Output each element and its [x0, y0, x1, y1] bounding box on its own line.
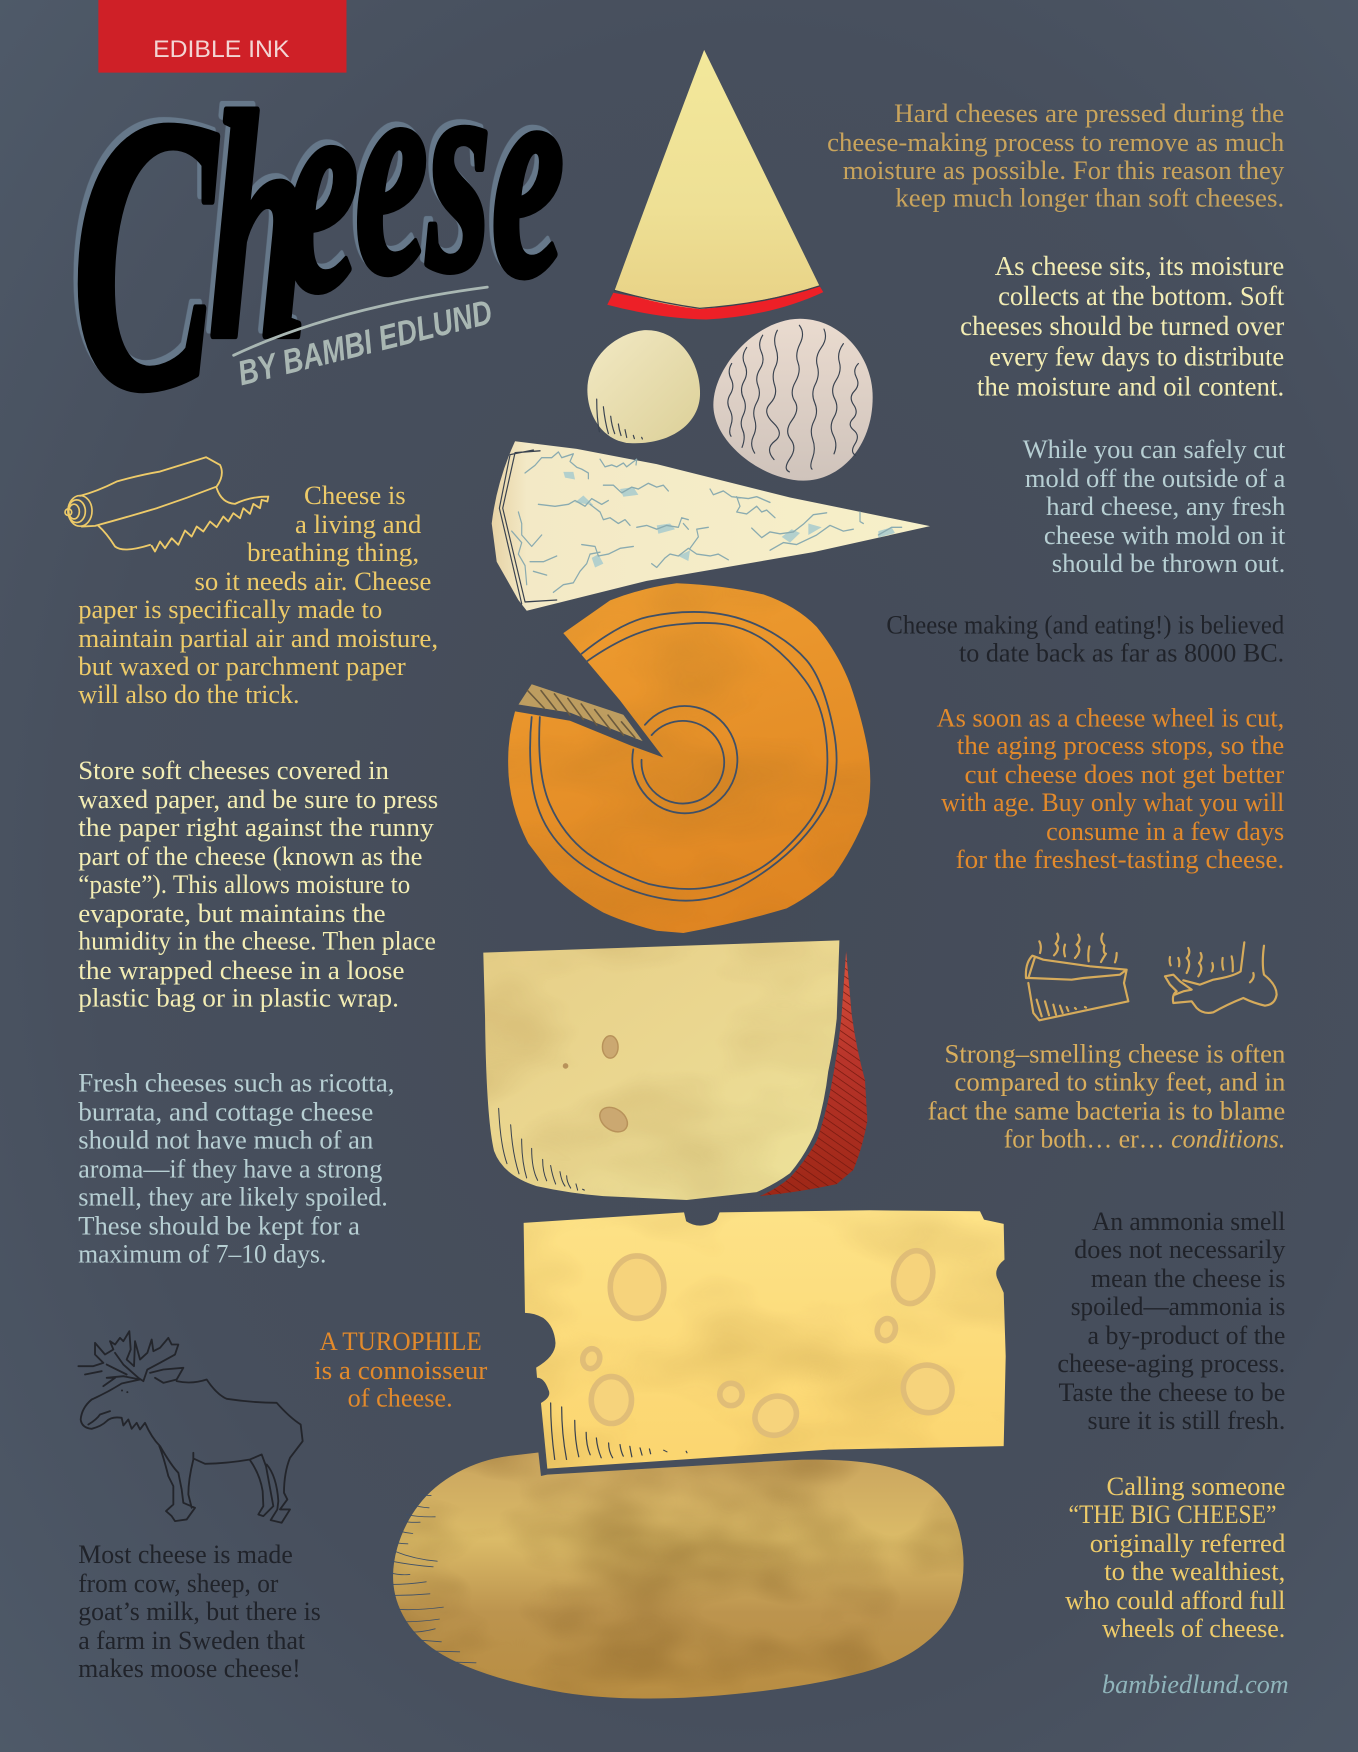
- icon: cheese paper roll: [65, 457, 268, 552]
- text: storing soft cheeses: humidity in the cheese. Then place: [78, 927, 436, 956]
- icon: moose: [78, 1331, 303, 1523]
- text: aging stops: As soon as a cheese wheel is cut,: [937, 703, 1284, 732]
- text: cheese is a living thing: maintain partial air and moisture,: [78, 624, 438, 653]
- cheese: orange wheel with cut slice: [508, 583, 870, 933]
- text: storing soft cheeses: [78, 756, 438, 1013]
- text: turophile definition: [314, 1327, 488, 1413]
- text: ammonia smell: cheese-aging process.: [1057, 1349, 1285, 1378]
- section tag: Edible Ink: [98, 0, 346, 73]
- text: smelly cheese: fact the same bacteria is to blame: [928, 1097, 1285, 1126]
- text: fresh cheeses: burrata, and cottage cheese: [78, 1098, 373, 1127]
- text: storing soft cheeses: evaporate, but maintains the: [78, 899, 386, 928]
- title: Cheese: s: [426, 4, 491, 333]
- text: cheese is a living thing: paper is specifically made to: [78, 595, 382, 624]
- text: ammonia smell: does not necessarily: [1074, 1235, 1286, 1264]
- title: Cheese: e: [492, 10, 564, 338]
- text: hard cheeses: moisture as possible. For this reason they: [843, 156, 1285, 185]
- text: storing soft cheeses: waxed paper, and be sure to press: [78, 785, 438, 814]
- text: turophile definition: A TUROPHILE: [320, 1327, 482, 1356]
- text: smelly cheese: for both… er… conditions.: [1004, 1125, 1285, 1154]
- cheese: hard triangle wedge: [607, 50, 823, 320]
- icon: smelly cheese and foot: [1026, 934, 1277, 1020]
- text: hard cheeses: Hard cheeses are pressed during the: [894, 99, 1284, 128]
- text: cheese is a living thing: Cheese is: [304, 481, 406, 510]
- text: fresh cheeses: maximum of 7–10 days.: [78, 1240, 326, 1269]
- text: the big cheese: originally referred: [1090, 1529, 1285, 1558]
- text: moose cheese: from cow, sheep, or: [78, 1569, 279, 1598]
- text: smelly cheese: Strong–smelling cheese is often: [944, 1040, 1285, 1069]
- text: mold: While you can safely cut: [1023, 435, 1286, 464]
- text: fresh cheeses: [78, 1069, 395, 1269]
- text: moisture collects: collects at the bottom. Soft: [998, 281, 1284, 312]
- text: the big cheese: “THE BIG CHEESE”: [1069, 1500, 1276, 1529]
- text: history of cheese making: to date back as far as 8000 BC.: [959, 638, 1284, 667]
- text: fresh cheeses: smell, they are likely spoiled.: [78, 1183, 388, 1212]
- text: the big cheese: Calling someone: [1107, 1472, 1285, 1501]
- text: moisture collects: [960, 251, 1285, 403]
- text: mold: [1023, 435, 1286, 578]
- text: aging stops: with age. Buy only what you will: [941, 788, 1284, 817]
- text: cheese is a living thing: a living and: [295, 510, 421, 539]
- text: ammonia smell: [1057, 1207, 1286, 1435]
- text: aging stops: cut cheese does not get better: [965, 760, 1284, 789]
- text: moose cheese: makes moose cheese!: [78, 1654, 301, 1683]
- text: ammonia smell: sure it is still fresh.: [1088, 1406, 1285, 1435]
- text: moose cheese: Most cheese is made: [78, 1540, 293, 1569]
- text: cheese is a living thing: breathing thing,: [247, 538, 419, 567]
- text: storing soft cheeses: plastic bag or in plastic wrap.: [78, 984, 399, 1013]
- text: smelly cheese: compared to stinky feet, and in: [955, 1068, 1285, 1097]
- text: the big cheese: wheels of cheese.: [1102, 1614, 1285, 1643]
- text: hard cheeses: keep much longer than soft cheeses.: [895, 184, 1284, 213]
- text: cheese is a living thing: but waxed or parchment paper: [78, 652, 406, 681]
- text: fresh cheeses: should not have much of an: [78, 1126, 373, 1155]
- text: history of cheese making: Cheese making (and eating!) is believed: [886, 611, 1284, 640]
- text: turophile definition: of cheese.: [348, 1384, 453, 1413]
- cheese: large brown round: [390, 1453, 964, 1699]
- text: mold: should be thrown out.: [1052, 549, 1285, 578]
- text: smelly cheese: [928, 1040, 1285, 1154]
- text: mold: hard cheese, any fresh: [1046, 492, 1285, 521]
- cheese: swiss slice with holes: [524, 1210, 1006, 1469]
- text: storing soft cheeses: Store soft cheeses covered in: [78, 756, 389, 785]
- text: storing soft cheeses: “paste”). This allows moisture to: [78, 870, 410, 899]
- title: Cheese: C: [73, 39, 220, 471]
- text: moose cheese: goat’s milk, but there is: [78, 1597, 321, 1626]
- text: ammonia smell: mean the cheese is: [1091, 1264, 1285, 1293]
- text: fresh cheeses: aroma—if they have a strong: [78, 1155, 382, 1184]
- text: cheese is a living thing: so it needs air. Cheese: [194, 567, 431, 596]
- text: ammonia smell: spoiled—ammonia is: [1071, 1292, 1285, 1321]
- title: Cheese: [73, 4, 564, 471]
- title: Cheese: h: [209, 47, 308, 406]
- text: moose cheese: [78, 1540, 321, 1683]
- text: the big cheese: to the wealthiest,: [1104, 1557, 1285, 1586]
- text: turophile definition: is a connoisseur: [314, 1356, 488, 1385]
- title: Cheese: e: [355, 6, 428, 335]
- text: cheese is a living thing: [78, 481, 438, 709]
- text: cheese is a living thing: will also do the trick.: [78, 680, 300, 709]
- text: aging stops: the aging process stops, so the: [957, 731, 1284, 760]
- text: moisture collects: As cheese sits, its moisture: [995, 251, 1284, 282]
- text: fresh cheeses: Fresh cheeses such as ricotta,: [78, 1069, 395, 1098]
- text: the big cheese: [1065, 1472, 1285, 1643]
- text: the big cheese: who could afford full: [1065, 1586, 1285, 1615]
- cheese: blue-veined wedge: [492, 441, 930, 611]
- text: history of cheese making: [886, 611, 1284, 667]
- text: ammonia smell: An ammonia smell: [1092, 1207, 1285, 1236]
- text: hard cheeses: [827, 99, 1285, 213]
- title: Cheese: e: [286, 24, 358, 353]
- byline: By Bambi Edlund: BY BAMBI EDLUND: [234, 293, 496, 393]
- text: moisture collects: every few days to distribute: [989, 341, 1284, 372]
- text: moose cheese: a farm in Sweden that: [78, 1626, 306, 1655]
- text: ammonia smell: Taste the cheese to be: [1058, 1378, 1285, 1407]
- section tag: Edible Ink: EDIBLE INK: [153, 36, 289, 63]
- text: fresh cheeses: These should be kept for a: [78, 1212, 360, 1241]
- website credit: bambiedlund.com: [1102, 1670, 1289, 1699]
- text: hard cheeses: cheese-making process to remove as much: [827, 128, 1284, 157]
- cheese: pale block with red rind: [483, 940, 867, 1200]
- text: storing soft cheeses: the paper right against the runny: [78, 813, 435, 842]
- text: mold: mold off the outside of a: [1025, 464, 1286, 493]
- text: storing soft cheeses: part of the cheese (known as the: [78, 842, 422, 871]
- cheese: small round ball: [587, 330, 700, 443]
- text: aging stops: for the freshest-tasting cheese.: [956, 845, 1284, 874]
- text: moisture collects: cheeses should be turned over: [960, 311, 1285, 342]
- cheese: large striped ball: [713, 319, 873, 481]
- text: moisture collects: the moisture and oil content.: [977, 372, 1284, 403]
- text: storing soft cheeses: the wrapped cheese in a loose: [78, 956, 405, 985]
- text: aging stops: [937, 703, 1284, 874]
- text: aging stops: consume in a few days: [1046, 817, 1284, 846]
- text: mold: cheese with mold on it: [1044, 521, 1286, 550]
- text: ammonia smell: a by-product of the: [1088, 1321, 1285, 1350]
